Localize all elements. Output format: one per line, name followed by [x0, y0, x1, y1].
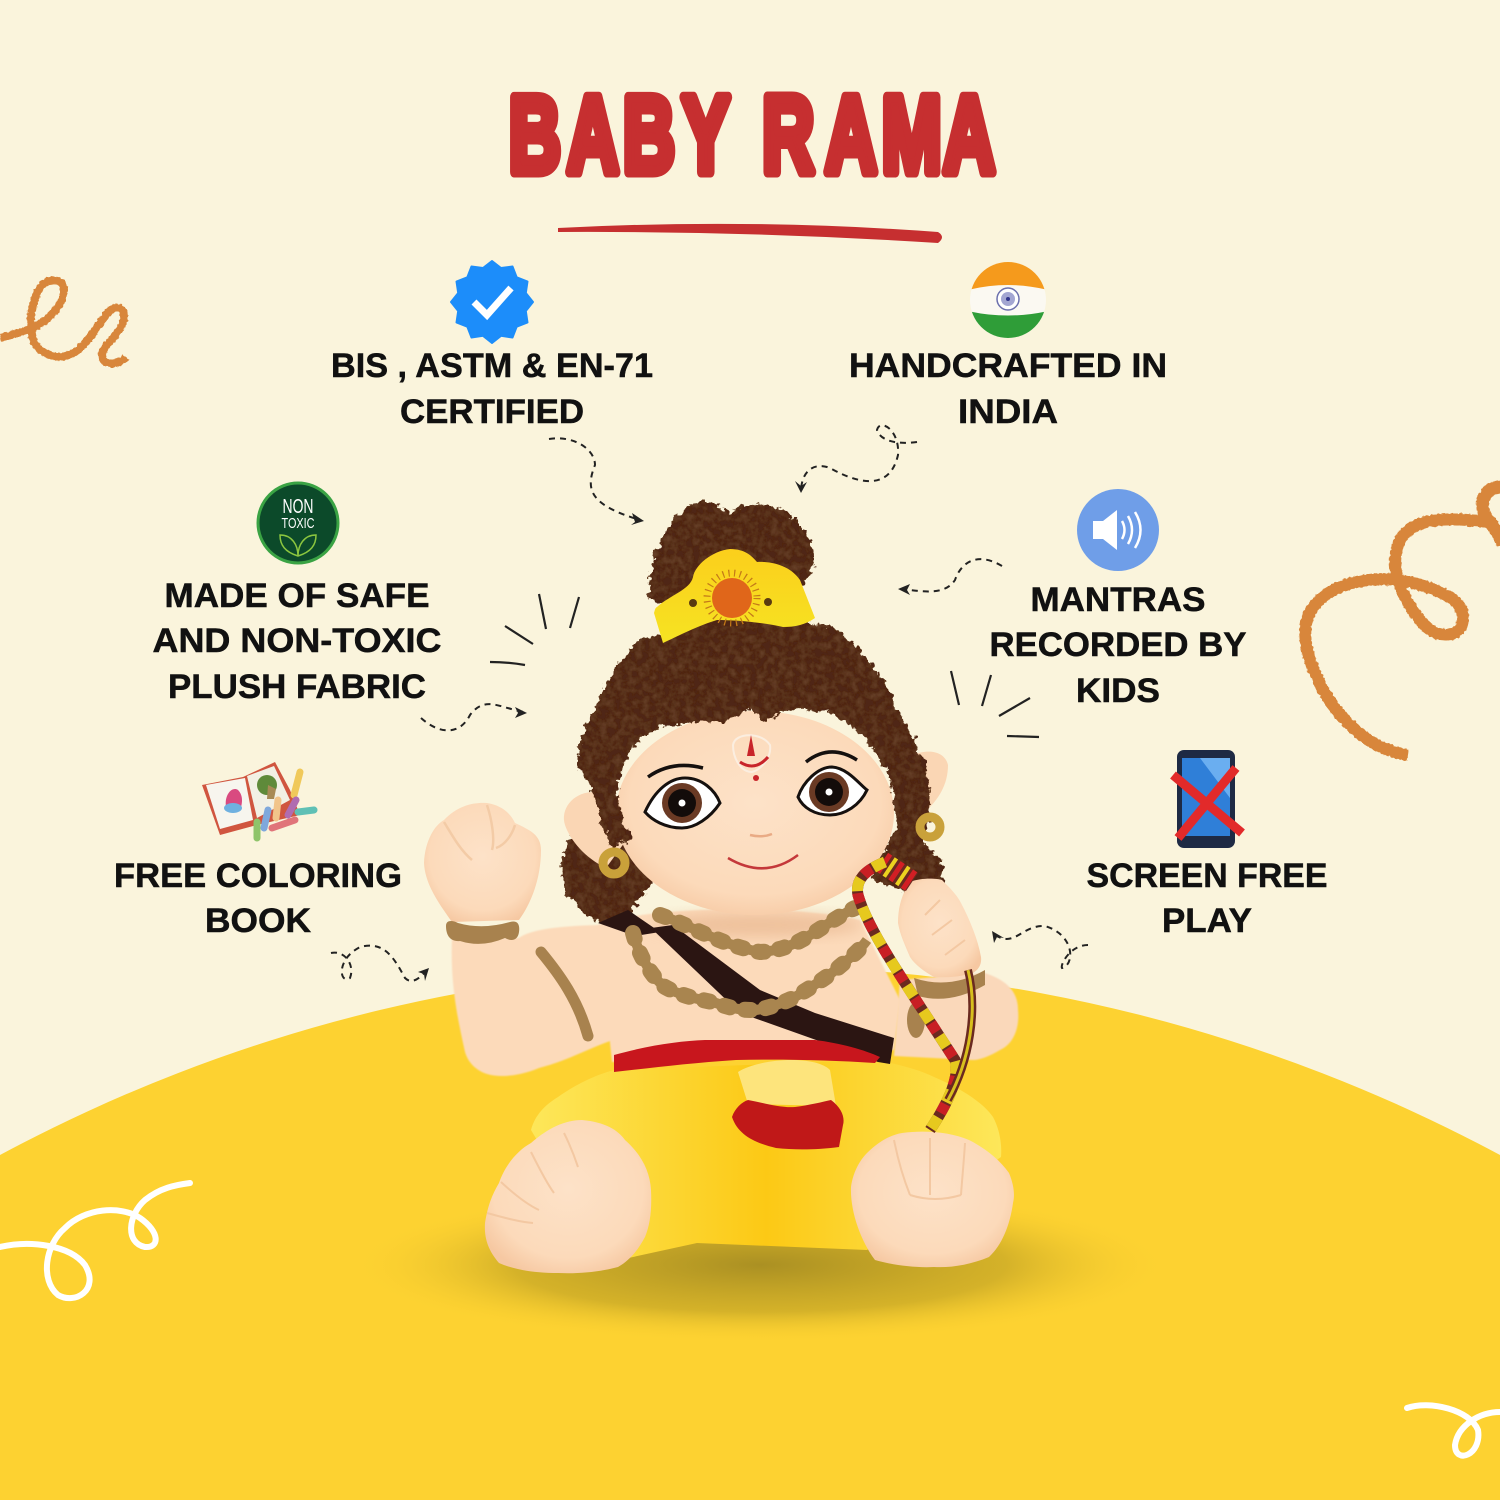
torso [598, 909, 900, 1062]
label: handcrafted: HANDCRAFTED IN [849, 347, 1167, 385]
arrow: non toxic to doll [421, 704, 524, 730]
hand holding bow [898, 879, 981, 977]
eyebrows [648, 752, 857, 777]
foot left [485, 1120, 651, 1273]
arrow: India to doll [801, 425, 917, 490]
label: screen free: SCREEN FREE [1086, 857, 1328, 895]
icon: speaker circle [1077, 489, 1159, 571]
wrist band right [914, 970, 985, 999]
label: mantras: MANTRAS [1030, 581, 1206, 619]
sash tuck [738, 1060, 836, 1106]
wrist band [446, 921, 519, 944]
label: mantras [990, 581, 1247, 710]
feature: coloring book [114, 762, 402, 940]
arrow: coloring book to doll [331, 946, 427, 981]
icon: Indian flag circle [968, 260, 1048, 340]
plush doll [424, 502, 1018, 1273]
arrowheads [418, 481, 1004, 981]
decoration: orange squiggle left [0, 280, 126, 364]
ground shadow [350, 1187, 1170, 1343]
viewer-right arm [894, 973, 1018, 1060]
raised fist [424, 803, 541, 922]
chin shadow [652, 913, 862, 937]
ribbon bow [857, 862, 972, 1130]
label: mantras: RECORDED BY [990, 626, 1247, 664]
icon: non toxic badge: TOXIC [282, 515, 315, 532]
label: certified [331, 347, 653, 431]
earring left [603, 852, 625, 874]
icon: non toxic badge [258, 483, 338, 563]
label: non toxic: AND NON-TOXIC [152, 622, 442, 660]
label: handcrafted: INDIA [958, 393, 1058, 431]
icon: colouring book and crayons [202, 762, 314, 838]
hair bun [650, 502, 814, 625]
crown sun jewel [689, 573, 772, 623]
earring right [920, 817, 940, 837]
back hair left [562, 815, 655, 922]
decoration: orange squiggle right [1305, 487, 1500, 755]
red sash knot [732, 1100, 844, 1149]
icon: blue verified badge [451, 261, 533, 343]
right eye [798, 767, 867, 815]
elbow patch [907, 1002, 925, 1038]
label: non toxic: MADE OF SAFE [164, 577, 430, 615]
label: non toxic: PLUSH FABRIC [168, 668, 426, 706]
label: coloring book: BOOK [205, 902, 311, 940]
label: handcrafted [849, 347, 1167, 431]
feature: non toxic [152, 483, 442, 706]
nose [750, 834, 772, 836]
crown [654, 549, 815, 643]
necklace inner [660, 908, 855, 952]
label: non toxic [152, 577, 442, 706]
label: screen free: PLAY [1162, 902, 1252, 940]
arrow: certified to doll [549, 438, 640, 520]
label: screen free [1086, 857, 1328, 940]
arrow: mantras to doll [902, 559, 1002, 591]
feature: certified [331, 261, 653, 431]
viewer-left arm [452, 925, 614, 1076]
feature: screen free [1086, 750, 1328, 940]
title underline [558, 224, 942, 243]
ear right [905, 752, 948, 812]
label: coloring book [114, 857, 402, 940]
icon: crossed out phone [1173, 750, 1242, 848]
burst lines left [490, 594, 579, 665]
label: coloring book: FREE COLORING [114, 857, 402, 895]
dark strap behind neck [598, 910, 660, 936]
mouth [728, 855, 798, 868]
label: mantras: KIDS [1076, 672, 1160, 710]
waist band [614, 1040, 880, 1072]
feature: handcrafted in India [849, 260, 1167, 431]
left eye [645, 778, 720, 828]
face [616, 711, 894, 915]
arrow: screen free to doll [992, 926, 1088, 968]
tilak [733, 735, 770, 781]
pants [531, 1060, 1001, 1262]
label: certified: BIS , ASTM & EN-71 [331, 347, 653, 385]
foot right [851, 1132, 1014, 1267]
dashed arrows [331, 425, 1088, 981]
feature: mantras [990, 489, 1247, 710]
icon: non toxic badge: NON [282, 496, 314, 518]
arm band [541, 952, 588, 1036]
head hair with fringe [576, 616, 930, 845]
back hair right [870, 830, 943, 893]
title: BABY RAMA [509, 73, 995, 196]
decoration: white squiggle left [0, 1183, 190, 1298]
necklace outer [633, 933, 867, 1010]
label: certified: CERTIFIED [400, 393, 584, 431]
yellow ground dome [0, 966, 1500, 1500]
decoration: white squiggle right [1407, 1405, 1500, 1456]
sash strap [651, 925, 894, 1064]
ear left [564, 792, 630, 868]
burst lines right [951, 671, 1039, 737]
